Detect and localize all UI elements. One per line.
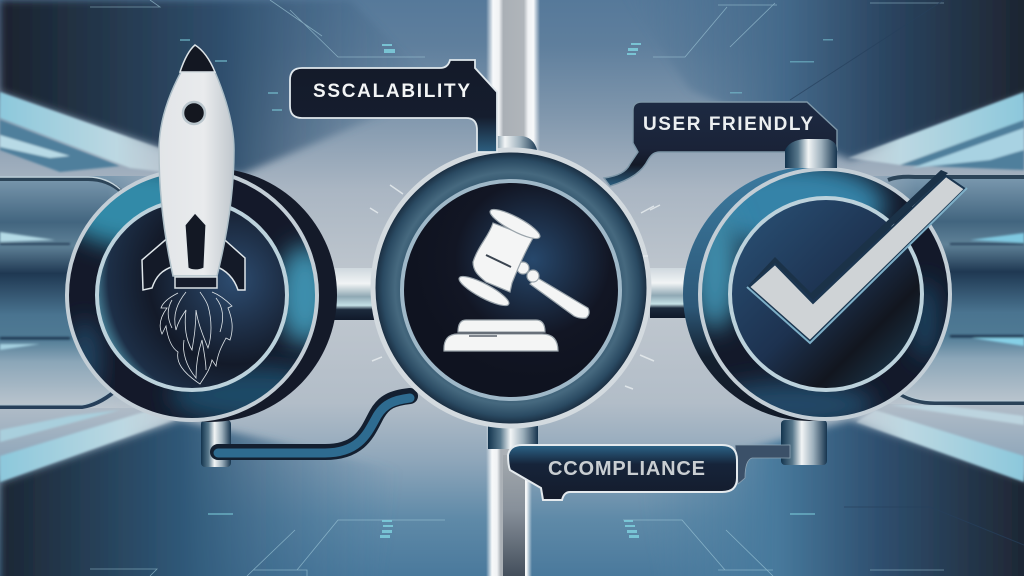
outer ring [702,171,948,417]
rocket fins [142,233,245,290]
pipe: compliance to right [735,445,790,484]
check mark shadow edge [747,170,948,300]
fin slot [185,213,206,270]
inner face [97,200,287,390]
icon: check mark [747,170,967,343]
check mark highlight [747,188,967,343]
gavel block top [458,320,545,332]
label: compliance [508,445,737,500]
dark diagonals [790,0,1024,545]
rocket nose [180,45,215,72]
label text: SSCALABILITY [313,81,470,102]
label shape [508,445,737,500]
gavel head [473,223,533,292]
gavel handle [530,277,589,318]
gavel joint 2 [527,270,539,282]
connector: bottom of right [781,420,827,465]
porthole [183,102,205,124]
connector: bottom of centre [488,425,538,449]
tech ticks [180,39,833,538]
outer edge [700,169,950,419]
pipe: left lower to centre [218,396,410,453]
label text: USER FRIENDLY [643,114,813,135]
rocket body [159,72,234,276]
icon: gavel [444,205,589,351]
exhaust flames [160,292,232,384]
gavel head mark [486,255,511,267]
connector: bottom of left [201,420,231,467]
left disc [60,163,340,429]
back cylinder [83,168,337,422]
label shape [604,102,837,186]
ticks around centre disc [370,185,660,389]
connector: top of centre [478,136,538,155]
nozzle [175,277,217,288]
gavel block mark [469,335,497,337]
check mark face [749,176,965,341]
connector: left to centre [318,268,378,320]
label: user friendly [604,102,837,186]
label: scalability [290,60,497,152]
right disc [683,163,959,429]
light streaks right [848,92,1024,482]
outer ring [69,176,315,418]
centre disc [373,150,649,426]
gavel top cap [487,205,543,243]
connector: top of right [785,139,837,168]
back cylinder [683,167,937,421]
gavel block bottom [444,334,558,351]
outer ring [373,150,649,426]
light streaks left [0,92,175,482]
outer edge [67,170,317,420]
label text: CCOMPLIANCE [548,458,705,480]
connector: centre to right [650,268,700,318]
inner face [402,181,620,399]
pipes: right side [888,177,1024,403]
gavel joint [517,262,529,274]
gavel bottom cap [456,272,512,310]
vertical light beam [486,0,540,576]
icon: rocket [142,45,245,384]
inner face [730,198,922,390]
pipes: left side [0,177,122,407]
label shape [290,60,497,152]
